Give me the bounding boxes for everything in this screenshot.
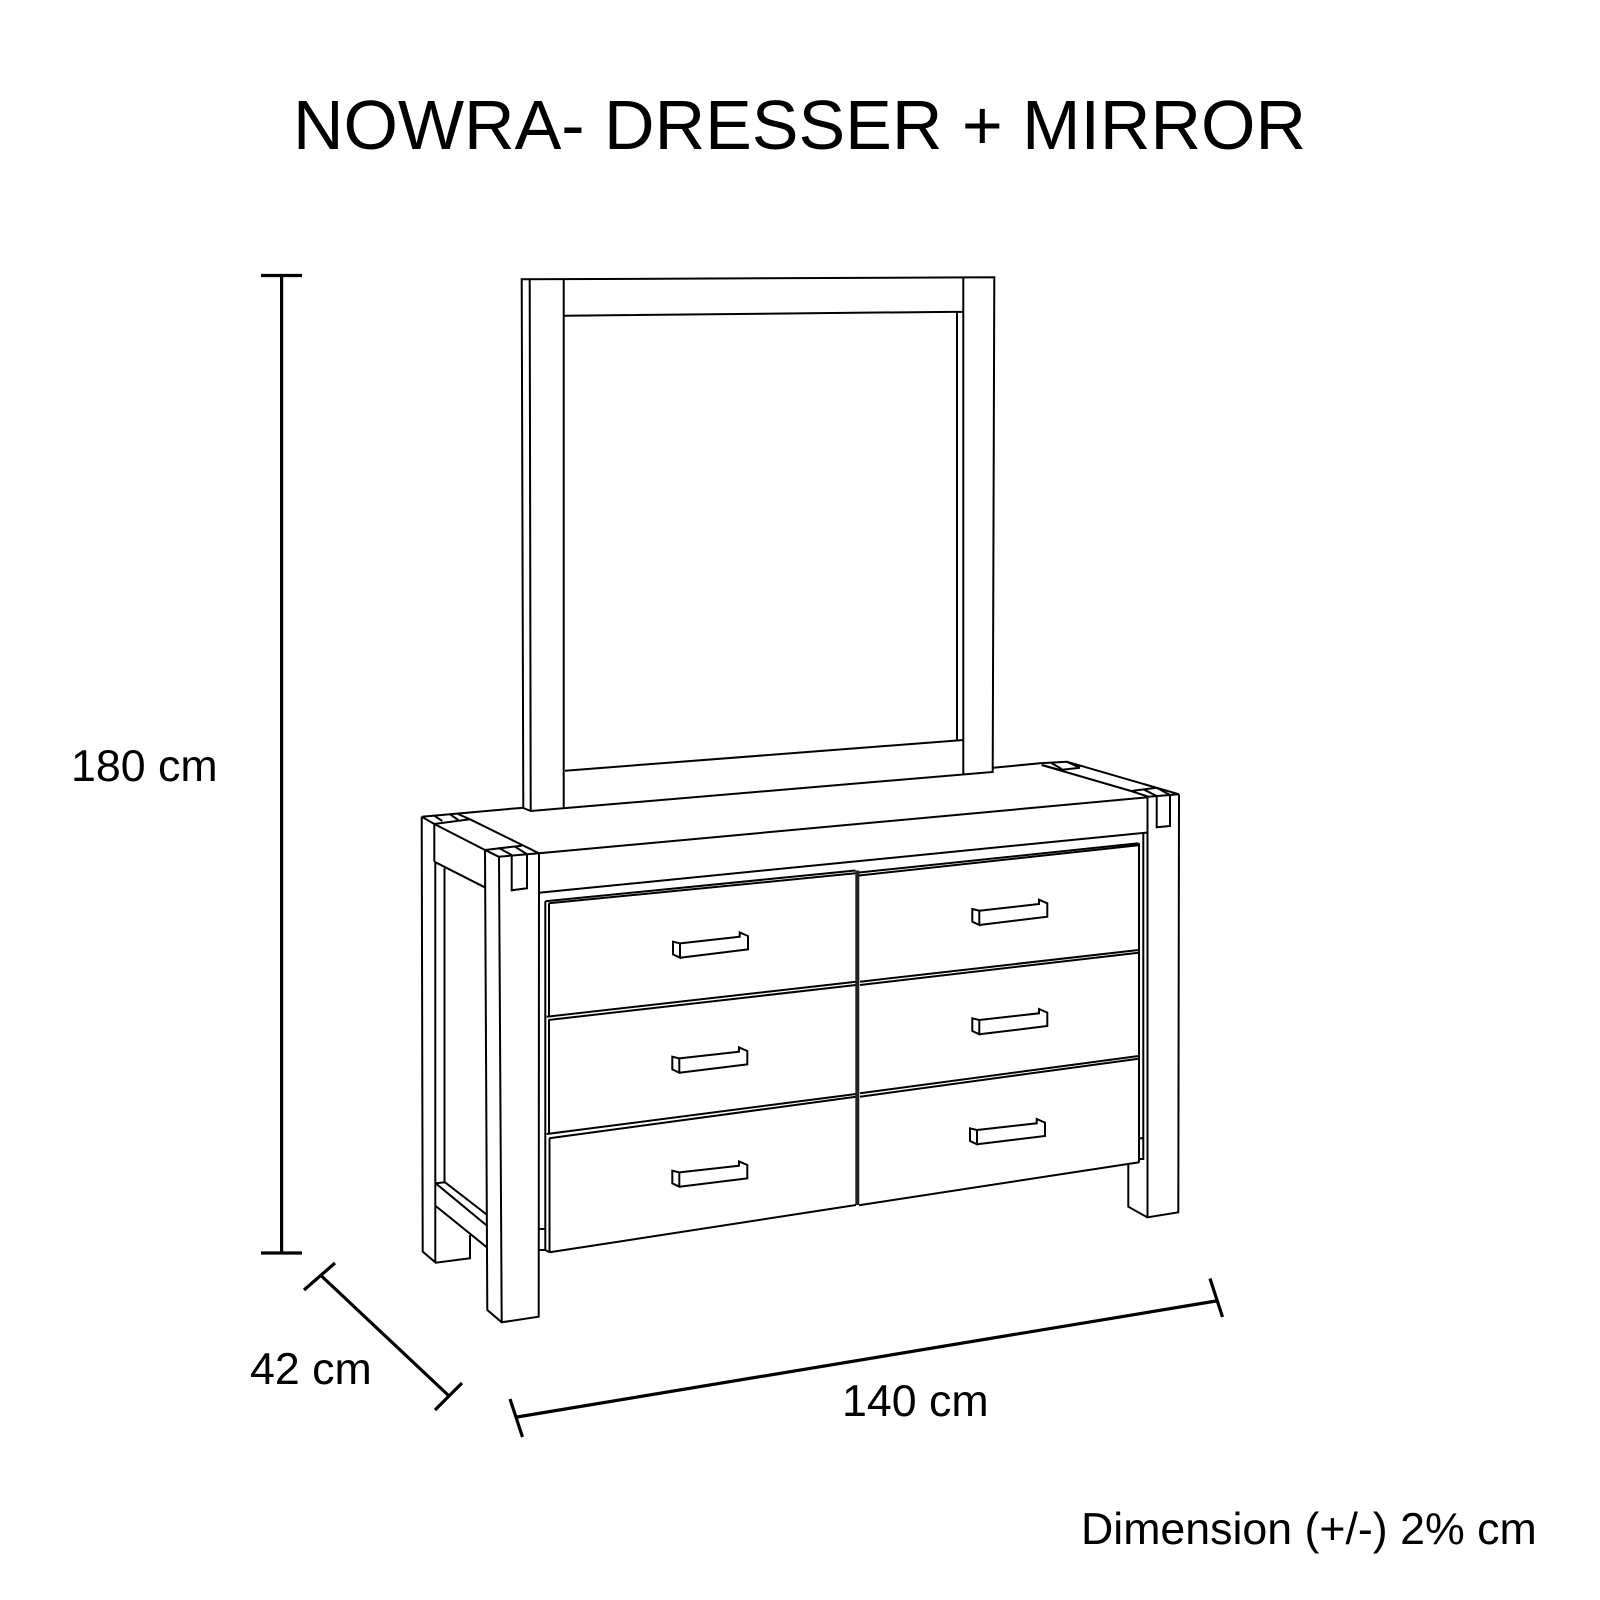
- mirror frame: [522, 277, 994, 811]
- front rail of dresser: [539, 797, 1148, 893]
- front right leg: [1128, 794, 1179, 1217]
- drawer handles: [672, 900, 1047, 1187]
- depth dimension line: [304, 1263, 462, 1410]
- furniture illustration: dresser and mirror: [422, 277, 1179, 1322]
- dresser top surface and joints: [422, 762, 1179, 857]
- height dimension line: [261, 276, 302, 1253]
- height label: 180 cm: [71, 742, 218, 791]
- left drawers: [545, 870, 856, 1252]
- tolerance note: Dimension (+/-) 2% cm: [1081, 1505, 1537, 1554]
- title: NOWRA- DRESSER + MIRROR: [293, 86, 1306, 164]
- width dimension line: [510, 1278, 1222, 1437]
- drawer frame left side: [539, 901, 550, 1252]
- drawer centre divider: [855, 870, 859, 1205]
- depth label: 42 cm: [250, 1345, 372, 1394]
- width label: 140 cm: [842, 1377, 989, 1426]
- right drawers: [859, 843, 1139, 1205]
- front left leg and side panel: [422, 817, 539, 1322]
